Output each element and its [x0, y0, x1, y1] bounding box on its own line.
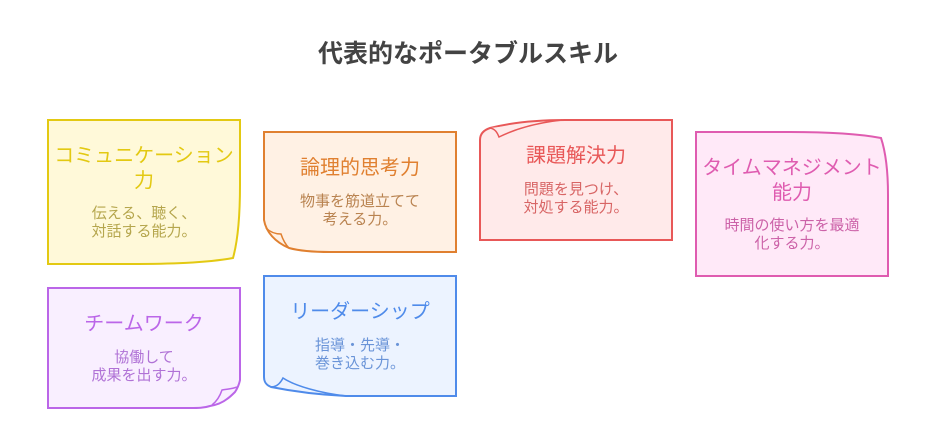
- heading: leadership: リーダーシップ: [290, 300, 430, 323]
- text: communication description: 伝える、聴く、: [92, 205, 196, 222]
- panel: communication: [48, 120, 240, 264]
- panel: problem solving: [480, 120, 672, 240]
- text: teamwork description: 協働して: [114, 349, 174, 366]
- text: time management description: 時間の使い方を最適: [724, 217, 860, 234]
- panel: logical thinking: [264, 132, 456, 252]
- heading: logical thinking: 論理的思考力: [300, 156, 420, 179]
- text: leadership description: 巻き込む力。: [315, 355, 405, 372]
- text: leadership description: 指導・先導・: [315, 337, 405, 354]
- panel: time management: [696, 132, 888, 276]
- heading: communication: 力: [134, 169, 154, 192]
- text: logical thinking description: 物事を筋道立てて: [300, 193, 420, 210]
- panel: leadership: [264, 276, 456, 396]
- panel: teamwork: [48, 288, 240, 408]
- text: time management description: 化する力。: [754, 235, 830, 252]
- heading: time management: 能力: [772, 181, 812, 204]
- heading: communication: コミュニケーション: [54, 145, 234, 167]
- text: communication description: 対話する能力。: [91, 223, 197, 240]
- heading: problem solving: 課題解決力: [526, 144, 626, 167]
- text: teamwork description: 成果を出す力。: [91, 367, 197, 384]
- text: problem solving description: 問題を見つけ、: [524, 181, 628, 198]
- heading: time management: タイムマネジメント: [702, 157, 882, 179]
- title: 代表的なポータブルスキル: [318, 39, 618, 68]
- text: logical thinking description: 考える力。: [323, 211, 397, 228]
- heading: teamwork: チームワーク: [84, 312, 204, 335]
- text: problem solving description: 対処する能力。: [523, 199, 629, 216]
